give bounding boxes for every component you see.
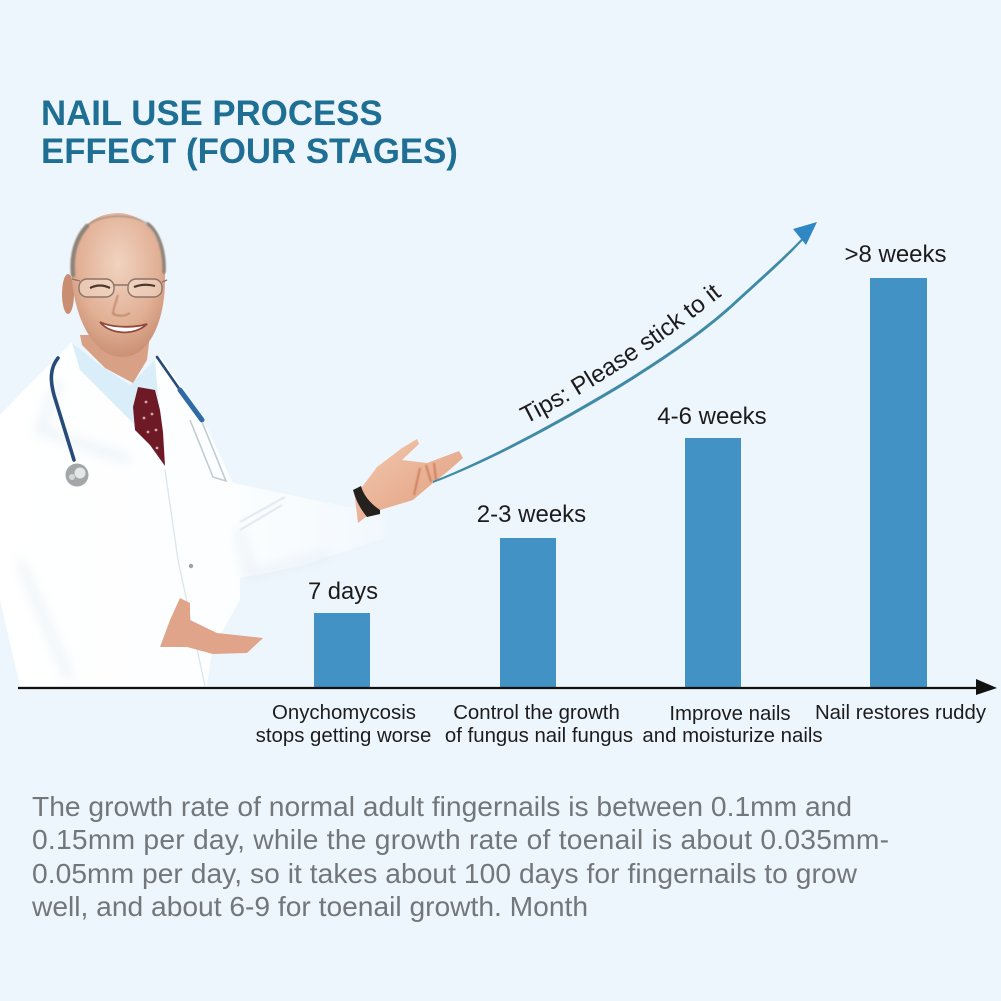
head [72,213,165,357]
coat [0,342,386,686]
doctor illustration [0,213,463,686]
coat button [189,564,193,568]
axis captions [256,702,987,747]
coat shading [20,380,330,680]
glasses [72,279,167,297]
stethoscope [51,357,202,460]
body paragraph: The growth rate of normal adult fingernails is between 0.1mm and [32,790,852,822]
lower hand [160,598,263,654]
title: EFFECT (FOUR STAGES) [41,132,458,171]
bar chart [18,241,997,747]
neck [80,335,150,383]
bar: 2-3 weeks [477,501,586,687]
tie [133,387,165,466]
title: NAIL USE PROCESS [41,94,383,133]
shirt collar [72,343,160,427]
wristwatch [353,486,380,517]
growth arrow [433,222,817,483]
axis captions: and moisturize nails [642,725,823,747]
bar: 2-3 weeks: 2-3 weeks [477,501,586,528]
stethoscope chest piece [66,464,88,486]
axis captions: stops getting worse [256,725,431,747]
title [41,94,458,171]
bar: 7 days [308,578,378,687]
bar: 4-6 weeks: 4-6 weeks [657,403,767,430]
bar: 7 days: 7 days [308,578,378,605]
bar: >8 weeks [844,241,947,687]
nose and smile [113,295,130,316]
body paragraph: 0.15mm per day, while the growth rate of toenail is about 0.035mm- [32,823,889,855]
body paragraph: well, and about 6-9 for toenail growth. Month [31,890,588,922]
axis arrow [18,679,997,695]
axis captions: Onychomycosis [272,702,416,724]
body paragraph [31,790,889,922]
bar: 4-6 weeks [657,403,767,687]
axis captions: Control the growth [453,702,620,724]
body paragraph: 0.05mm per day, so it takes about 100 days for fingernails to grow [32,857,858,889]
hair [73,216,164,275]
axis captions: Nail restores ruddy [815,702,987,724]
eyes [90,285,155,288]
upper hand [354,439,463,523]
axis captions: Improve nails [669,703,791,725]
ear [62,274,74,314]
bar: >8 weeks: >8 weeks [844,241,947,268]
axis captions: of fungus nail fungus [445,725,633,747]
tip text: Tips: Please stick to it [518,284,722,422]
